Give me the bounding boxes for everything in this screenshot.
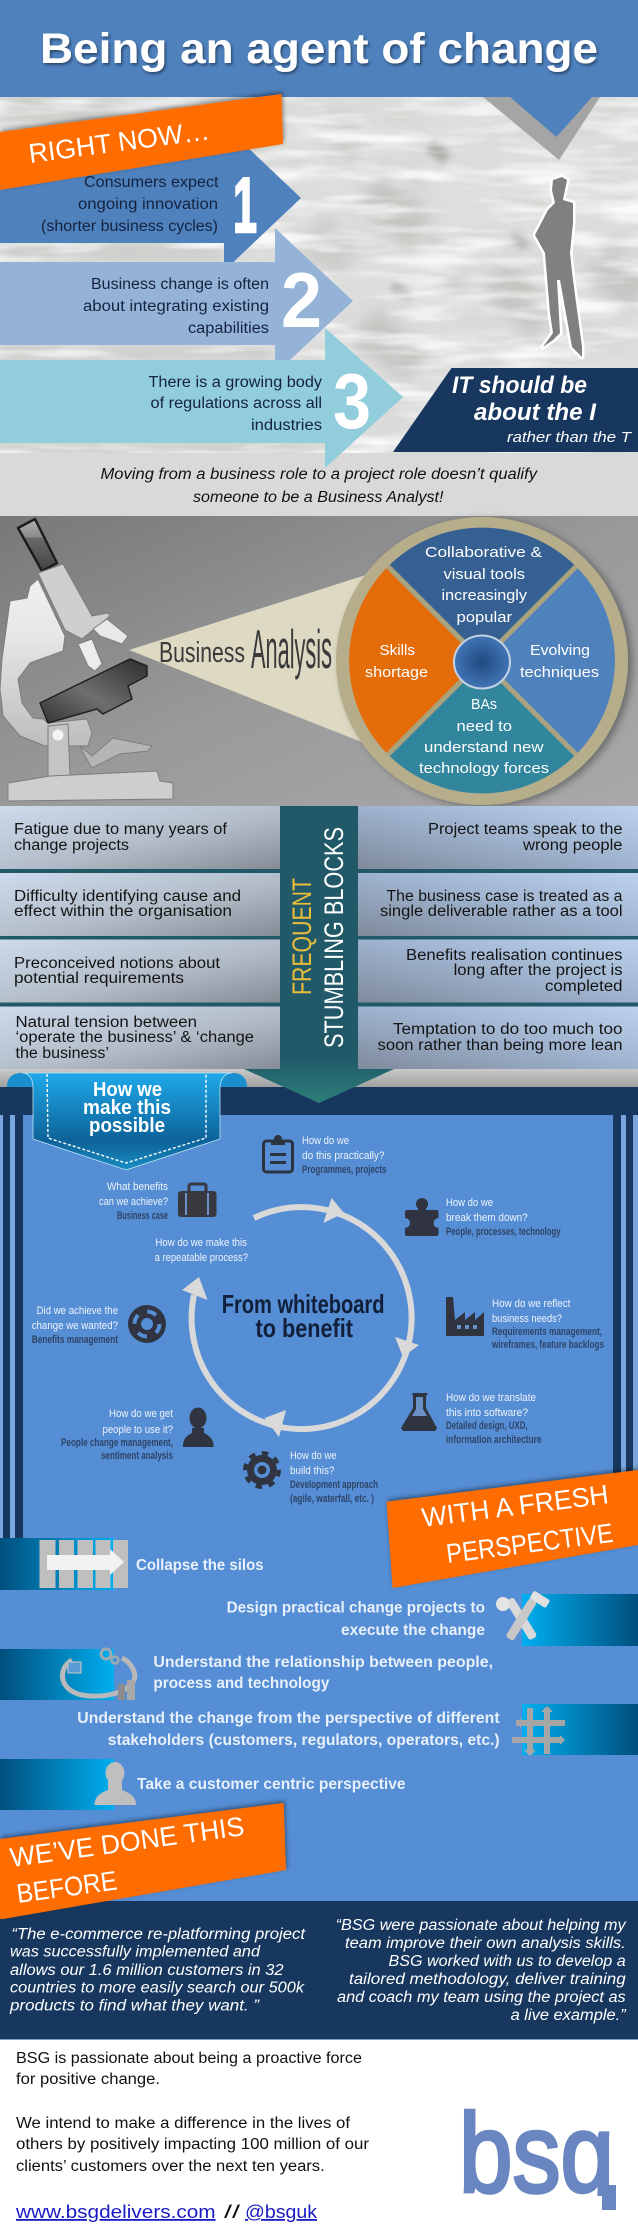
quote: e-commerce: was successfully implemented and bbox=[10, 1944, 261, 1961]
title: Being an agent of change bbox=[40, 25, 598, 73]
left row text: change projects bbox=[14, 837, 129, 854]
wheel quadrant: collaborative tools: visual tools bbox=[444, 566, 525, 583]
statement text: Moving from a business role to a project role doesn’t qualify bbox=[100, 466, 538, 483]
arrow 3 text: industries bbox=[251, 417, 322, 434]
item: stakeholder perspective: stakeholders (customers, regulators, operators, etc.) bbox=[108, 1732, 500, 1749]
step: break them down bbox=[400, 1197, 561, 1238]
arrow 2 text: Business change is often bbox=[91, 276, 269, 293]
callout: IT should be about the I bbox=[393, 368, 638, 452]
cycle: from whiteboard to benefit bbox=[155, 1198, 419, 1437]
statement text: someone to be a Business Analyst! bbox=[193, 489, 444, 506]
icon: cycle with gear and people bbox=[63, 1649, 135, 1700]
item: stakeholder perspective: Understand the change from the perspective of different bbox=[77, 1710, 500, 1727]
arrow 2 text bbox=[83, 276, 269, 337]
ribbon: how we make this possible bbox=[7, 1073, 247, 1170]
arrow 3 text: of regulations across all bbox=[150, 395, 322, 412]
cycle centre heading: From whiteboard bbox=[222, 1289, 384, 1319]
section background: newspaper texture bbox=[0, 97, 638, 453]
icon: microscope bbox=[0, 519, 173, 801]
icon: clipboard bbox=[264, 1135, 292, 1172]
numeral 1: 1 bbox=[233, 161, 257, 249]
right row text: Benefits realisation continues bbox=[406, 947, 623, 964]
icon: customer silhouette bbox=[94, 1762, 136, 1805]
right row text: long after the project is bbox=[454, 962, 623, 979]
step: build this: How do we bbox=[290, 1450, 336, 1462]
quote: analysis skills: team improve their own analysis skills. bbox=[345, 1935, 626, 1952]
panel: microscope background bbox=[0, 516, 638, 806]
step: did we achieve the change: Did we achieve the bbox=[37, 1305, 118, 1317]
quote: e-commerce bbox=[9, 1926, 306, 2015]
step: build this bbox=[245, 1450, 378, 1505]
icon: factory bbox=[446, 1297, 484, 1336]
logo: bsg: bsg bbox=[459, 2091, 614, 2216]
banner: right now bbox=[0, 94, 283, 190]
step: reflect business needs: How do we reflect bbox=[492, 1298, 570, 1310]
wheel quadrant: collaborative tools bbox=[388, 528, 576, 660]
banner: we've done this before bbox=[0, 1803, 286, 1919]
footer statement: for positive change. bbox=[16, 2071, 160, 2088]
wheel quadrant: skills shortage: shortage bbox=[365, 664, 428, 681]
step: reflect business needs bbox=[446, 1297, 604, 1351]
step: did we achieve the change: change we wanted? bbox=[32, 1320, 118, 1332]
item: design practical change projects: execute the change bbox=[341, 1622, 485, 1639]
heading: Business Analysis: Business bbox=[159, 637, 245, 669]
footer statement: BSG is passionate about being a proactive force bbox=[16, 2050, 362, 2067]
quote: e-commerce: allows our 1.6 million customers in 32 bbox=[10, 1962, 284, 1979]
footer links: // bbox=[224, 2202, 240, 2222]
right row text: Temptation to do too much too bbox=[393, 1021, 622, 1038]
step: did we achieve the change bbox=[32, 1305, 166, 1346]
stumbling blocks: right rows bbox=[358, 806, 638, 1070]
quote: e-commerce: products to find what they want. ” bbox=[9, 1998, 260, 2015]
wheel quadrant: skills shortage: Skills bbox=[380, 642, 415, 659]
step: what benefits: What benefits bbox=[107, 1181, 168, 1193]
right row text: The business case is treated as a bbox=[386, 888, 623, 905]
banner: we've done this before: BEFORE bbox=[15, 1866, 119, 1909]
item: collapse the silos: Collapse the silos bbox=[136, 1557, 264, 1574]
step: reflect business needs: business needs? bbox=[492, 1313, 562, 1325]
icon: standing person bbox=[535, 177, 582, 357]
left row text: Preconceived notions about bbox=[14, 955, 221, 972]
step: get people to use it: People change management, bbox=[61, 1437, 173, 1449]
step: build this: build this? bbox=[290, 1465, 334, 1477]
quote: analysis skills: “BSG were passionate about helping my bbox=[336, 1917, 627, 1934]
arrow 3 text: There is a growing body bbox=[148, 374, 322, 391]
frequent stumbling blocks arrow: STUMBLING BLOCKS bbox=[319, 827, 349, 1048]
step: do this practically: do this practically? bbox=[302, 1150, 384, 1162]
callout: IT should be about the I: rather than the T bbox=[507, 429, 633, 446]
footer statement bbox=[16, 2050, 369, 2175]
wheel quadrant: evolving techniques: techniques bbox=[520, 664, 599, 681]
left row text: ‘operate the business’ & ‘change bbox=[16, 1029, 254, 1046]
right row text: single deliverable rather as a tool bbox=[380, 903, 622, 920]
frequent stumbling blocks arrow: FREQUENT bbox=[287, 878, 317, 995]
light beam bbox=[129, 575, 366, 743]
item: people process technology: Understand the relationship between people, bbox=[153, 1654, 493, 1671]
icon: briefcase bbox=[178, 1184, 216, 1217]
step: build this: Development approach bbox=[290, 1479, 378, 1491]
step: did we achieve the change: Benefits management bbox=[32, 1334, 118, 1346]
step: translate into software: How do we translate bbox=[446, 1392, 536, 1404]
wheel quadrant: BAs need to understand: need to bbox=[456, 718, 512, 735]
arrow 3 text bbox=[148, 374, 322, 434]
wheel quadrant: collaborative tools: increasingly bbox=[442, 587, 528, 604]
step: translate into software bbox=[401, 1392, 542, 1446]
cycle centre heading bbox=[222, 1289, 384, 1343]
item: customer centric bbox=[0, 1759, 406, 1810]
wheel quadrant: BAs need to understand: technology forces bbox=[419, 760, 549, 777]
footer links bbox=[15, 2202, 318, 2222]
icon: crossing arrows bbox=[512, 1706, 565, 1756]
item: people process technology bbox=[0, 1649, 493, 1700]
icon: silos with arrow bbox=[40, 1540, 128, 1588]
quote: analysis skills bbox=[336, 1917, 627, 2024]
footer statement: We intend to make a difference in the lives of bbox=[16, 2115, 351, 2132]
repeatable process label: How do we make this bbox=[155, 1237, 247, 1249]
arrow 1 text: Consumers expect bbox=[84, 174, 219, 191]
step: what benefits bbox=[99, 1181, 216, 1222]
step: what benefits: can we achieve? bbox=[99, 1196, 168, 1208]
arrow 2 bbox=[0, 228, 353, 374]
right row text bbox=[378, 821, 623, 1054]
heading: Business Analysis bbox=[159, 618, 332, 680]
icon: flask bbox=[401, 1393, 437, 1431]
step: break them down: How do we bbox=[446, 1197, 493, 1209]
arrow 2 text: about integrating existing bbox=[83, 298, 269, 315]
left row text: Fatigue due to many years of bbox=[14, 821, 228, 838]
banner: with a fresh perspective bbox=[386, 1470, 638, 1588]
numeral 3: 3 bbox=[333, 357, 371, 445]
wheel quadrant: evolving techniques: Evolving bbox=[530, 642, 590, 659]
step: break them down: break them down? bbox=[446, 1212, 528, 1224]
arrow 1 text: ongoing innovation bbox=[78, 196, 218, 213]
step: get people to use it: How do we get bbox=[109, 1408, 173, 1420]
wheel quadrant: collaborative tools: popular bbox=[456, 609, 512, 626]
step: build this: (agile, waterfall, etc. ) bbox=[290, 1493, 374, 1505]
banner: with a fresh perspective: PERSPECTIVE bbox=[444, 1518, 615, 1569]
icon: puzzle piece bbox=[400, 1198, 444, 1236]
callout: IT should be about the I: about the I bbox=[474, 399, 597, 426]
step: translate into software: information architecture bbox=[446, 1434, 542, 1446]
title band bbox=[0, 0, 638, 97]
item: collapse the silos bbox=[0, 1538, 264, 1590]
quote: analysis skills: and coach my team using the project as bbox=[337, 1989, 626, 2006]
cycle centre heading: to benefit bbox=[256, 1313, 353, 1343]
wheel quadrant: BAs need to understand bbox=[388, 660, 576, 793]
frequent stumbling blocks arrow bbox=[244, 806, 394, 1103]
banner: we've done this before: WE’VE DONE THIS bbox=[8, 1811, 246, 1873]
item: design practical change projects bbox=[227, 1590, 638, 1646]
wheel quadrant: BAs need to understand: understand new bbox=[424, 739, 544, 756]
step: break them down: People, processes, technology bbox=[446, 1226, 561, 1238]
step: do this practically: How do we bbox=[302, 1135, 349, 1147]
statement text bbox=[100, 466, 538, 506]
left row text: effect within the organisation bbox=[14, 903, 232, 920]
item: customer centric: Take a customer centric perspective bbox=[137, 1776, 406, 1793]
stumbling blocks: left rows bbox=[0, 806, 280, 1070]
right row text: soon rather than being more lean bbox=[378, 1037, 622, 1054]
left row text: Difficulty identifying cause and bbox=[14, 888, 241, 905]
arrow 1 text: (shorter business cycles) bbox=[41, 218, 218, 235]
icon: gear bbox=[245, 1453, 279, 1487]
grey statement panel bbox=[0, 453, 638, 516]
panel: client quotes bbox=[0, 1901, 638, 2040]
step: get people to use it: people to use it? bbox=[102, 1424, 173, 1436]
wheel quadrant: evolving techniques bbox=[482, 566, 615, 754]
right row text: completed bbox=[545, 978, 622, 995]
step: what benefits: Business case bbox=[117, 1210, 168, 1222]
quote: analysis skills: tailored methodology, deliver training bbox=[349, 1971, 626, 1988]
banner: right now: RIGHT NOW… bbox=[27, 115, 211, 169]
grey strip bbox=[0, 1069, 638, 1087]
wheel quadrant: collaborative tools: Collaborative & bbox=[425, 544, 542, 561]
quote: analysis skills: BSG worked with us to develop a bbox=[388, 1953, 626, 1970]
step: translate into software: Detailed design, UXD, bbox=[446, 1420, 528, 1432]
quote: e-commerce: countries to more easily search our 500k bbox=[10, 1980, 305, 1997]
wheel quadrant: skills shortage bbox=[349, 566, 482, 754]
banner: with a fresh perspective: WITH A FRESH bbox=[420, 1479, 610, 1533]
wheel bbox=[336, 517, 628, 805]
arrow 1 bbox=[0, 125, 301, 271]
right row text: wrong people bbox=[522, 837, 622, 854]
ribbon: how we make this possible: How we bbox=[93, 1079, 162, 1101]
item: people process technology: process and technology bbox=[153, 1675, 330, 1692]
left row text bbox=[14, 821, 254, 1062]
icon: crossed tools bbox=[496, 1590, 550, 1641]
footer statement: others by positively impacting 100 million of our bbox=[16, 2136, 369, 2153]
step: reflect business needs: Requirements management, bbox=[492, 1326, 602, 1338]
quote: analysis skills: a live example.” bbox=[511, 2007, 627, 2024]
item: stakeholder perspective bbox=[77, 1704, 638, 1756]
footer links: www.bsgdelivers.com bbox=[15, 2202, 216, 2222]
footer statement: clients’ customers over the next ten years. bbox=[16, 2158, 325, 2175]
step: get people to use it: sentiment analysis bbox=[101, 1450, 173, 1462]
text: Analysis bbox=[251, 618, 332, 680]
left row text: potential requirements bbox=[14, 970, 184, 987]
arrow 2 text: capabilities bbox=[188, 320, 269, 337]
ribbon: how we make this possible: possible bbox=[89, 1115, 165, 1137]
step: do this practically bbox=[264, 1135, 386, 1176]
pointer chevron from title band bbox=[483, 97, 600, 160]
step: translate into software: this into software? bbox=[446, 1407, 528, 1419]
callout: IT should be about the I: IT should be bbox=[452, 372, 587, 399]
numeral 2: 2 bbox=[281, 256, 322, 344]
quote: e-commerce: “The e-commerce re-platforming project bbox=[11, 1926, 306, 1943]
wheel quadrant: BAs need to understand: BAs bbox=[471, 696, 497, 713]
left row text: Natural tension between bbox=[16, 1014, 197, 1031]
arrow 1 text bbox=[41, 174, 219, 235]
panel: main blue area bbox=[0, 1087, 638, 1901]
wheel hub bbox=[454, 636, 510, 688]
arrow 3 bbox=[0, 328, 403, 468]
right row text: Project teams speak to the bbox=[428, 821, 622, 838]
repeatable process label bbox=[155, 1237, 248, 1264]
step: do this practically: Programmes, projects bbox=[302, 1164, 386, 1176]
item: design practical change projects: Design practical change projects to bbox=[227, 1600, 485, 1617]
footer links: @bsguk bbox=[245, 2202, 318, 2222]
ribbon: how we make this possible: make this bbox=[83, 1097, 171, 1119]
left row text: the business’ bbox=[16, 1045, 109, 1062]
repeatable process label: a repeatable process? bbox=[155, 1252, 248, 1264]
icon: lifebuoy bbox=[128, 1305, 166, 1343]
step: get people to use it bbox=[61, 1408, 214, 1462]
icon: person bbox=[183, 1408, 214, 1447]
